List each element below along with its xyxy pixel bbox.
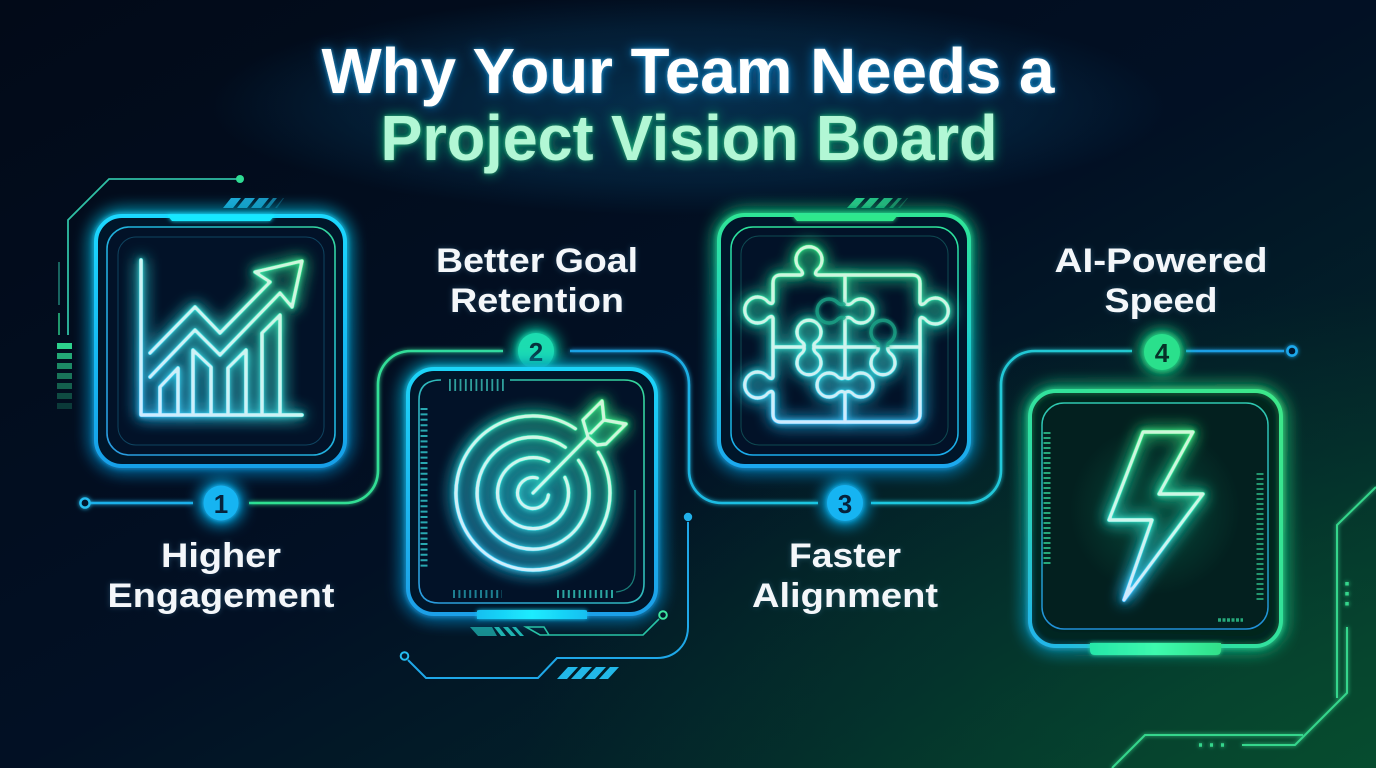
- icon: growth chart: [141, 260, 302, 415]
- step badge 2: 2: [529, 337, 543, 367]
- icon: target with arrow: [456, 401, 626, 570]
- label: higher engagement: Higher: [161, 537, 281, 575]
- circuit decoration top-left: [57, 175, 244, 409]
- tick marks: [1047, 432, 1260, 620]
- frame: [719, 215, 969, 466]
- stripes: [847, 198, 908, 208]
- label: AI-powered speed: Speed: [1104, 282, 1218, 320]
- label: better goal retention: Better Goal: [436, 242, 638, 280]
- label: AI-powered speed: AI-Powered: [1054, 242, 1268, 280]
- title: Project Vision Board: [380, 102, 998, 174]
- label: faster alignment: [752, 537, 938, 615]
- stripes: [223, 198, 284, 208]
- label: better goal retention: [436, 242, 638, 320]
- halo behind target: [438, 398, 628, 588]
- circuit below panel: [401, 513, 692, 678]
- step badge 4: [1144, 334, 1180, 370]
- step badge 1: [204, 486, 238, 520]
- step badge 2: [518, 333, 554, 369]
- step badge 1: 1: [214, 489, 228, 519]
- frame: [96, 215, 345, 466]
- panel 1: higher engagement: [57, 175, 345, 466]
- label: higher engagement: Engagement: [108, 577, 334, 615]
- panel 2: better goal retention: [401, 369, 692, 679]
- faded puzzle knobs: [817, 299, 895, 347]
- small stripes: [470, 627, 524, 636]
- stripes: [557, 667, 619, 679]
- frame: [1030, 391, 1281, 655]
- label: higher engagement: [108, 537, 334, 615]
- circuit decoration bottom-right: [1112, 487, 1376, 768]
- title: [322, 35, 1055, 174]
- icon: jigsaw puzzle: [745, 247, 948, 422]
- halo behind bolt: [1070, 425, 1240, 595]
- title: Why Your Team Needs a: [322, 35, 1055, 107]
- connector line linking steps: [80, 346, 1297, 508]
- icon: lightning bolt: [1109, 432, 1203, 600]
- panel 3: faster alignment: [719, 198, 969, 466]
- step badge 3: [827, 485, 863, 521]
- label: faster alignment: Alignment: [752, 577, 938, 615]
- frame: [408, 369, 656, 619]
- label: better goal retention: Retention: [450, 282, 624, 320]
- step badge 4: 4: [1155, 338, 1170, 368]
- step badge 3: 3: [838, 489, 852, 519]
- tick marks: [424, 385, 614, 594]
- panel 4: AI-powered speed: [1030, 391, 1281, 655]
- label: AI-powered speed: [1054, 242, 1268, 320]
- label: faster alignment: Faster: [789, 537, 901, 575]
